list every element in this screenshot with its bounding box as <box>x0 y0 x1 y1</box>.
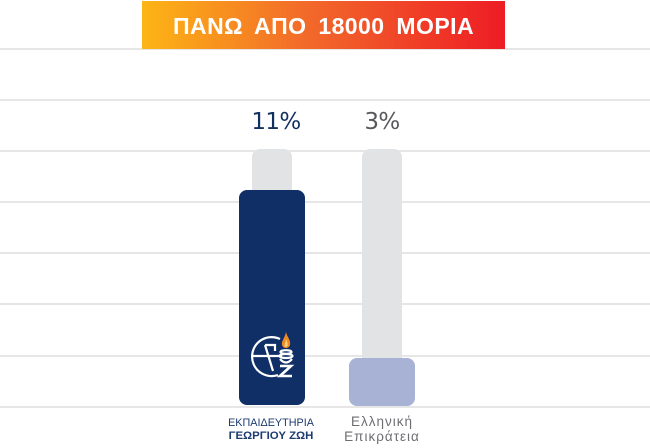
category label: Greece <box>344 414 420 444</box>
category label: school <box>228 417 314 442</box>
title banner: ΠΑΝΩ ΑΠΟ 18000 ΜΟΡΙΑ <box>173 13 474 39</box>
bar: Greece 3% <box>349 358 415 406</box>
icon: school logo <box>250 332 294 378</box>
category label: Greece: Επικράτεια <box>344 429 420 444</box>
bar: school 11% <box>239 190 305 405</box>
value label: 11%: 11% <box>251 109 301 135</box>
title banner <box>142 1 505 49</box>
value label: 3%: 3% <box>364 109 400 135</box>
category label: school: ΓΕΩΡΓΙΟΥ ΖΩΗ <box>229 430 313 442</box>
bar track: school <box>252 149 292 209</box>
category label: school: ΕΚΠΑΙΔΕΥΤΗΡΙΑ <box>228 417 314 429</box>
category label: Greece: Ελληνική <box>351 414 413 429</box>
bar track: Greece <box>362 149 402 374</box>
